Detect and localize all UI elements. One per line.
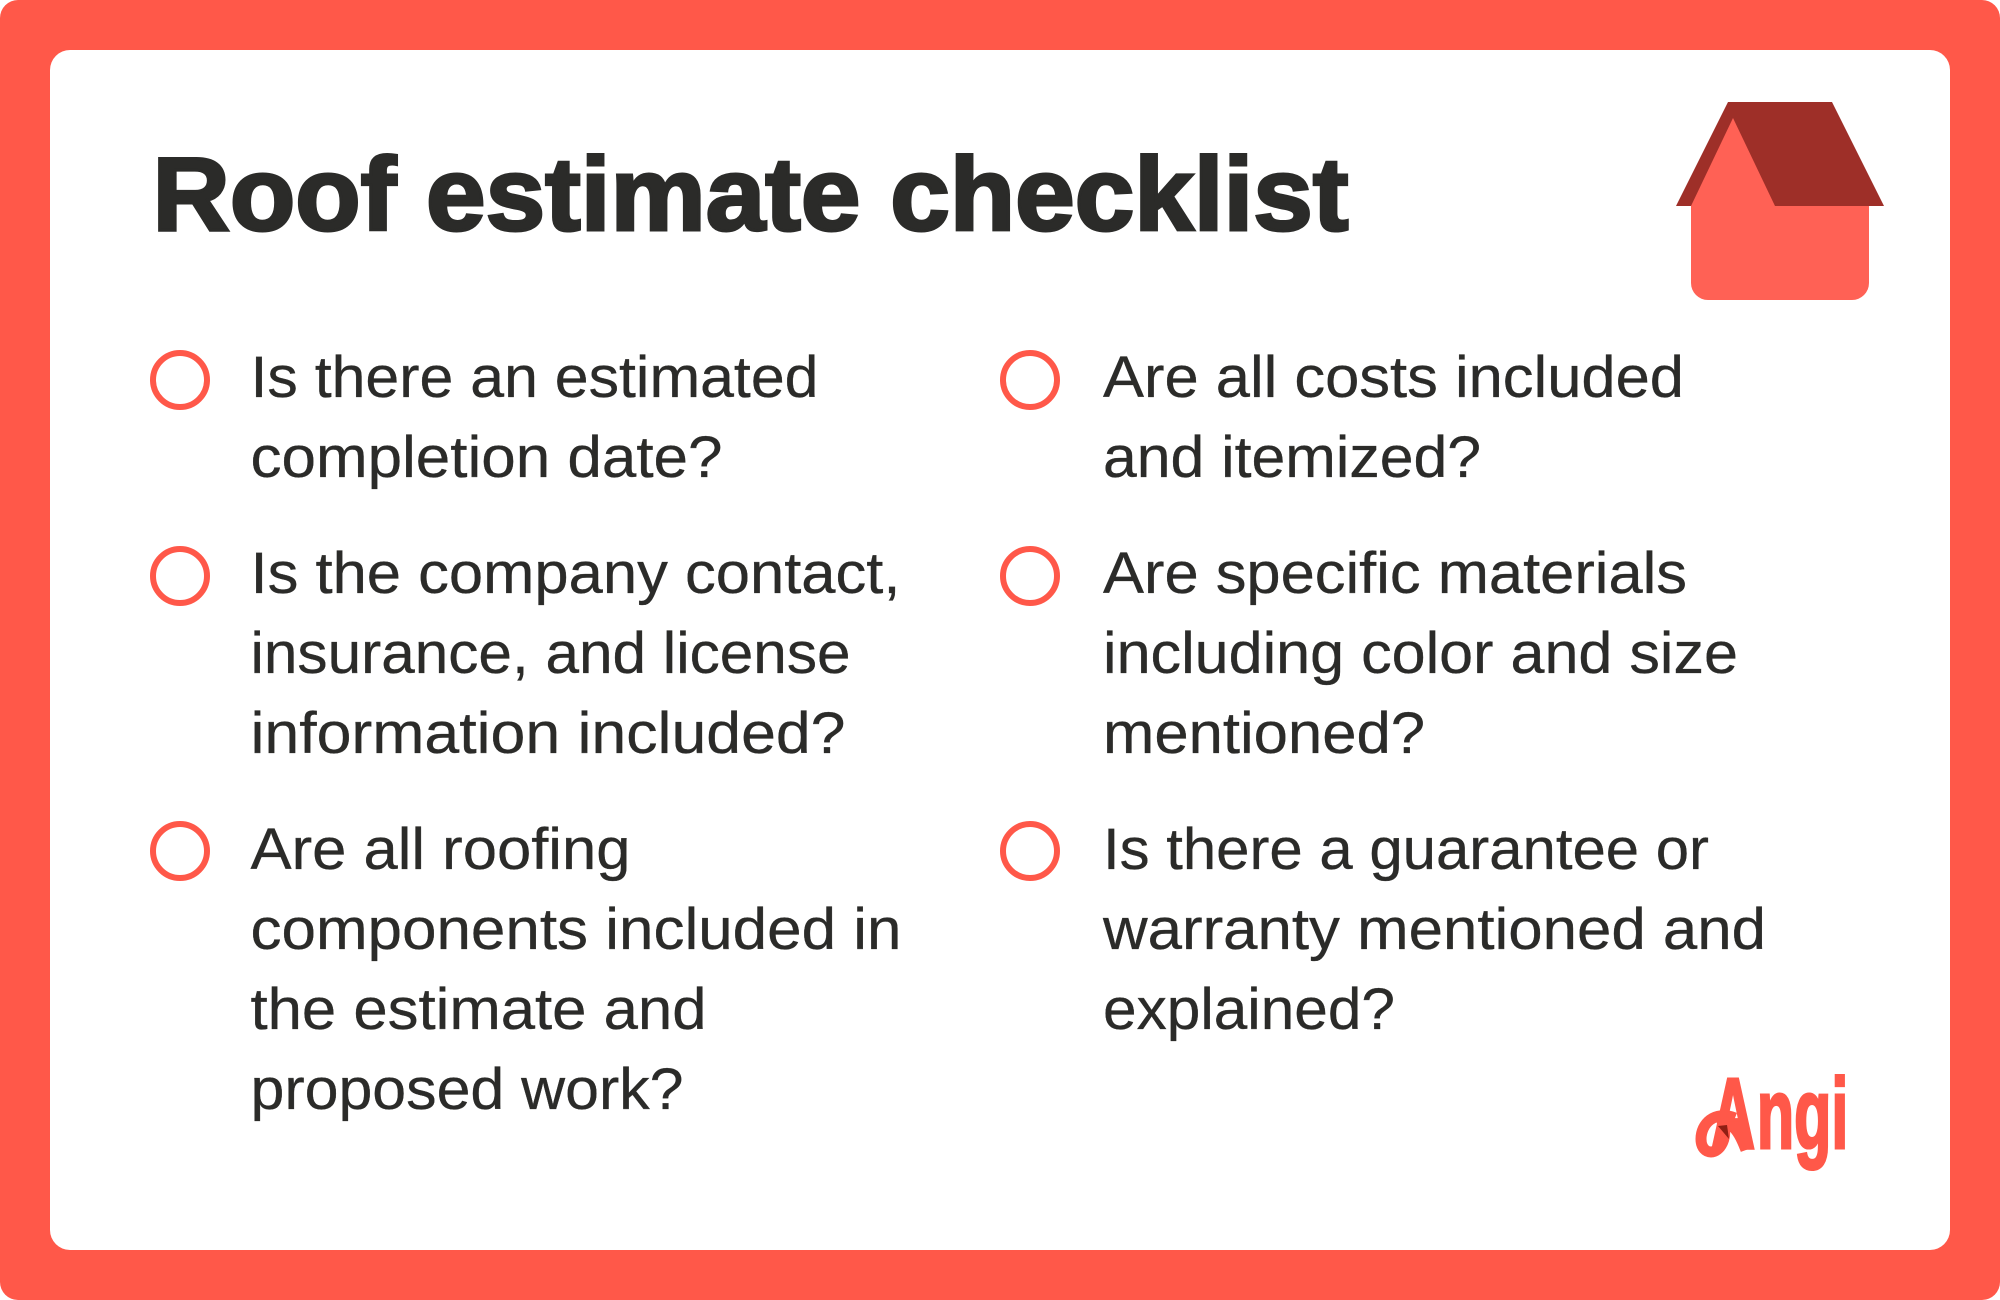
checklist item: company information: information included?	[250, 701, 846, 766]
title: Roof estimate checklist	[152, 137, 1348, 253]
checklist item: roofing components: components included in	[250, 897, 902, 962]
checklist item: completion date: Is there an estimated	[250, 345, 818, 410]
checklist item: specific materials: mentioned?	[1103, 701, 1425, 766]
checklist item: roofing components: Are all roofing	[250, 817, 630, 882]
checklist item: roofing components	[153, 817, 902, 1122]
checklist item: guarantee or warranty: warranty mentioned and	[1102, 897, 1766, 962]
checklist item: specific materials: Are specific materials	[1103, 541, 1687, 606]
checklist item: costs itemized	[1003, 345, 1684, 490]
checklist item: costs itemized: Are all costs included	[1103, 345, 1684, 410]
checklist item: company information: insurance, and license	[250, 621, 850, 686]
checklist item: costs itemized: and itemized?	[1103, 425, 1481, 490]
checklist item: specific materials	[1003, 541, 1738, 766]
checklist item: roofing components: the estimate and	[250, 977, 706, 1042]
checklist item: specific materials: including color and size	[1103, 621, 1738, 686]
checklist item: roofing components: proposed work?	[250, 1057, 684, 1122]
logo: Angi: Angi	[1711, 1057, 1848, 1170]
checklist item: completion date: completion date?	[250, 425, 722, 490]
checklist item: company information: Is the company contact,	[250, 541, 900, 606]
checklist item: completion date	[153, 345, 818, 490]
checklist item: guarantee or warranty	[1003, 817, 1766, 1042]
icon: house	[1676, 102, 1884, 300]
checklist item: guarantee or warranty: explained?	[1103, 977, 1395, 1042]
checklist item: company information	[153, 541, 900, 766]
checklist item: guarantee or warranty: Is there a guarantee or	[1103, 817, 1709, 882]
